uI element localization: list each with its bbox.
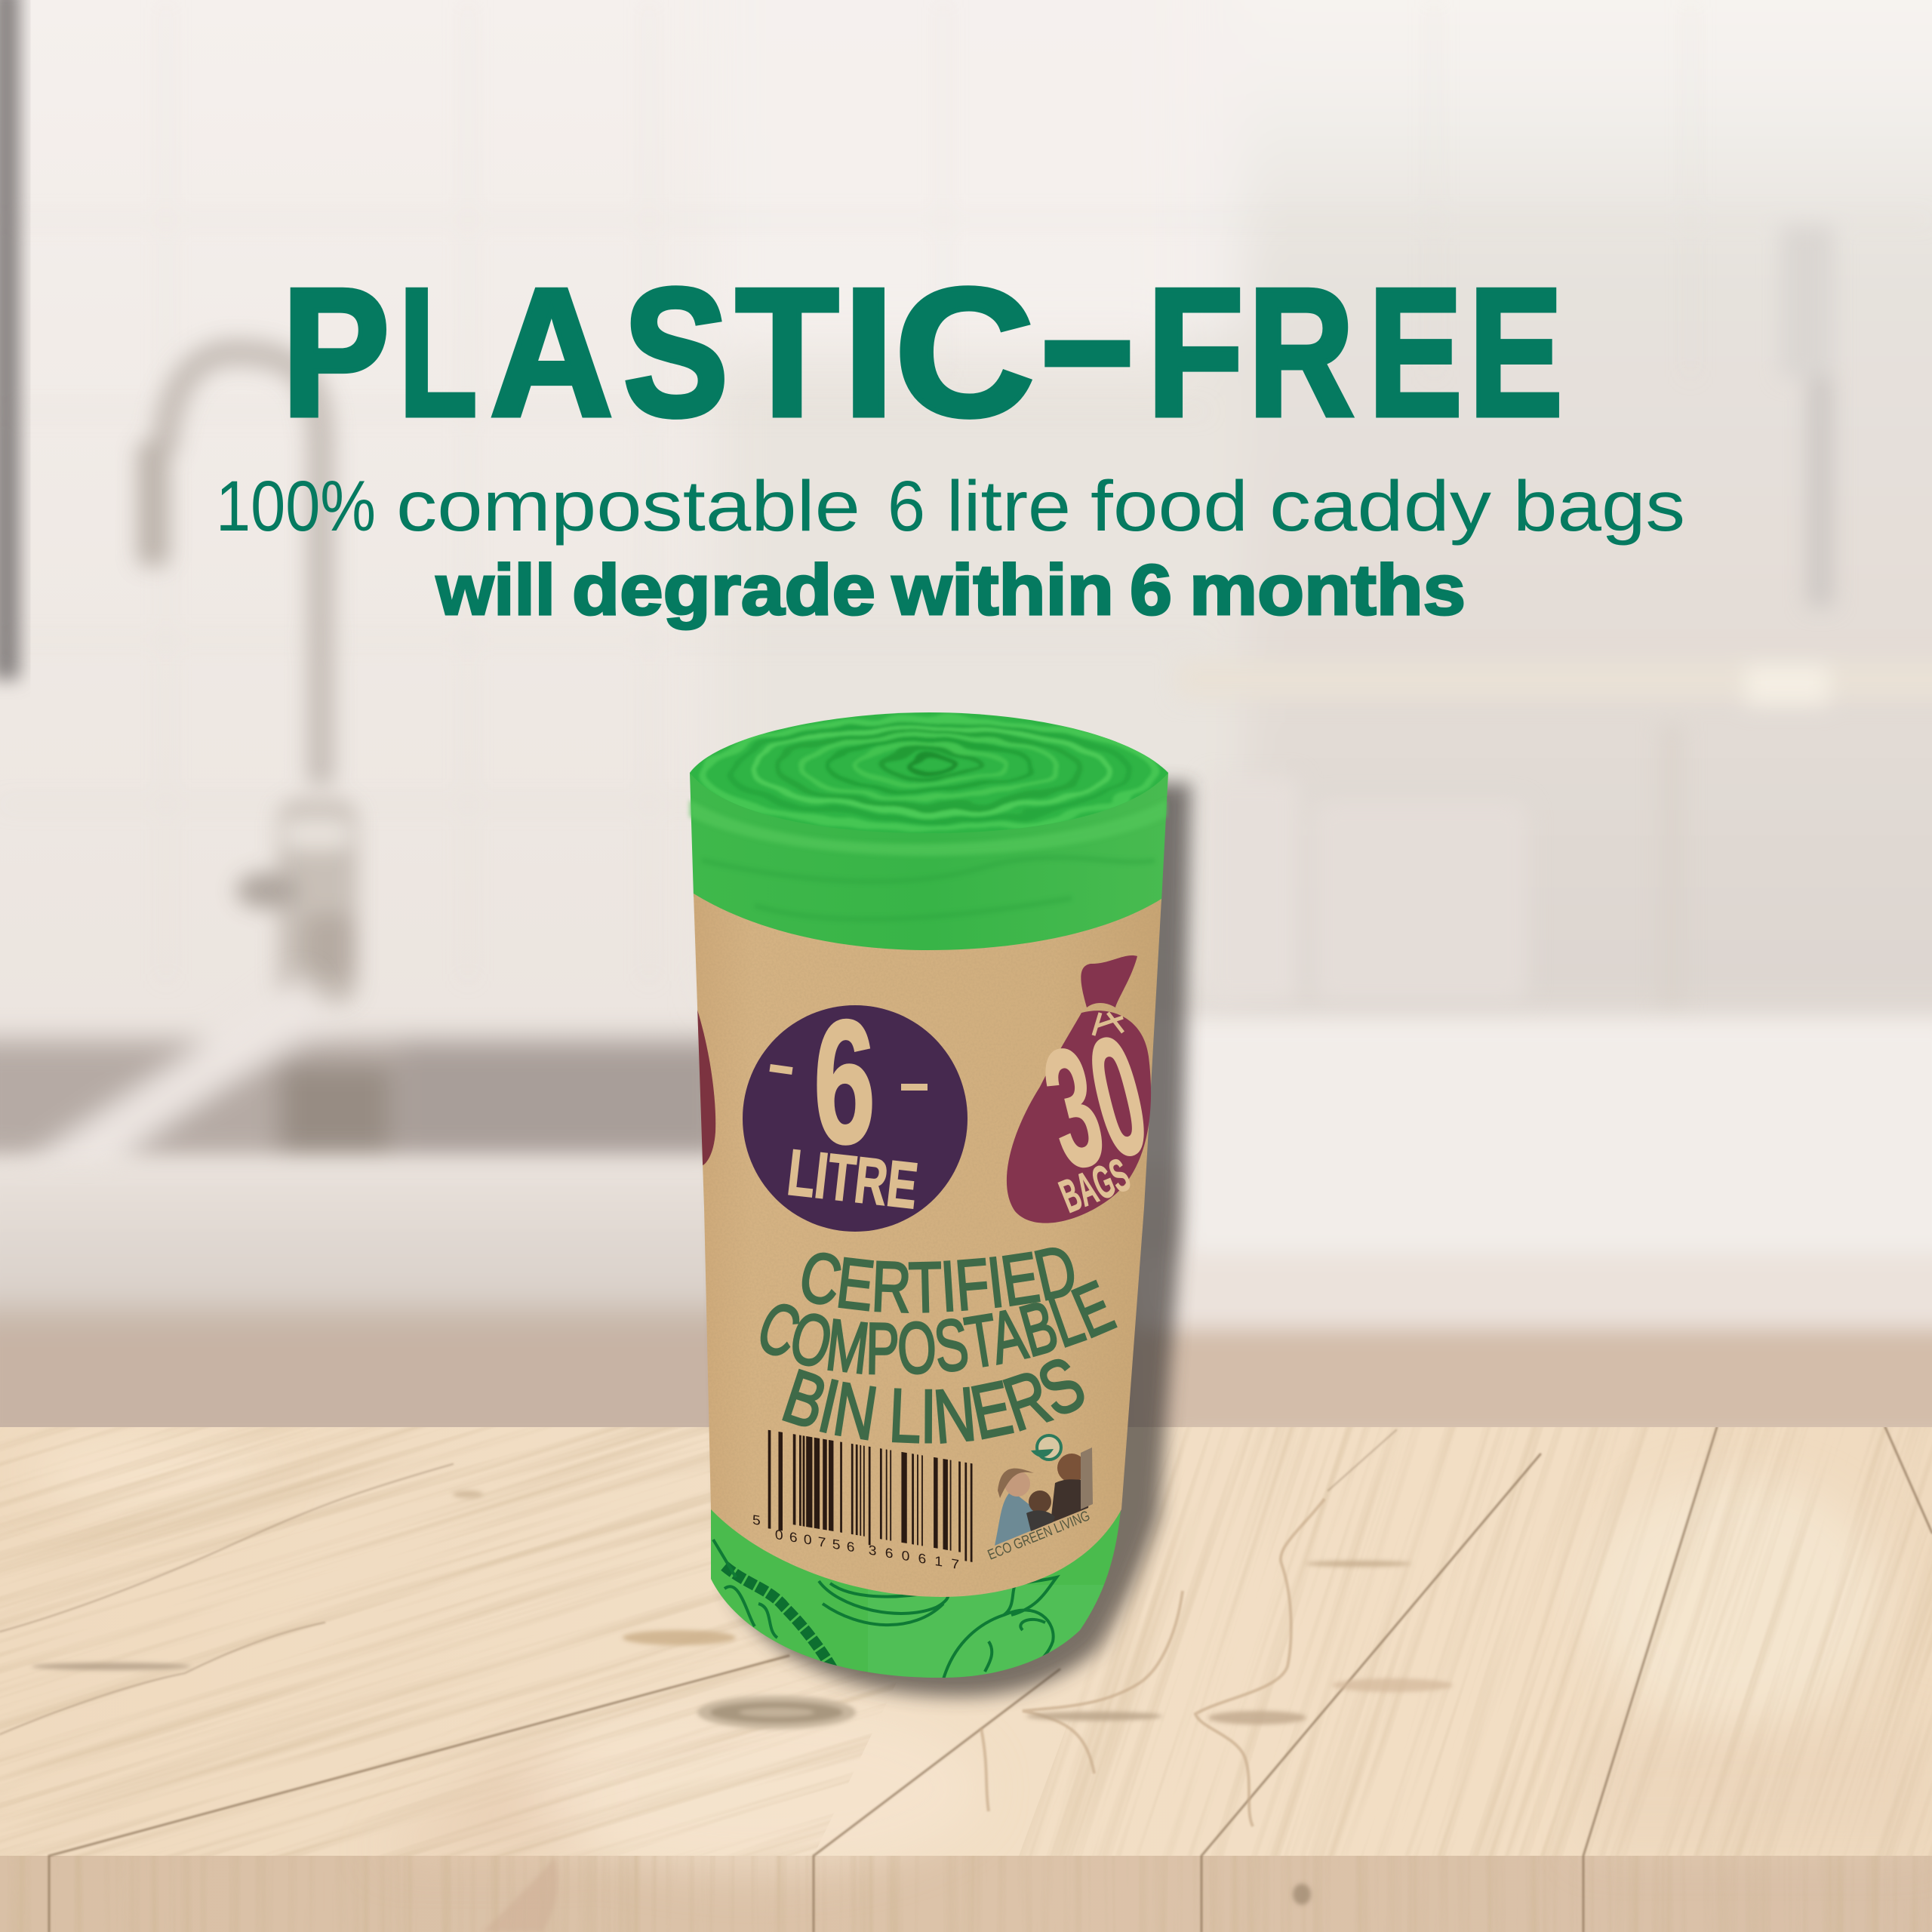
subtitle emphasis: months <box>1189 550 1466 630</box>
title: E <box>1369 251 1463 454</box>
roll shadow <box>709 783 1191 1697</box>
subtitle emphasis: 6 <box>1130 550 1172 630</box>
product name <box>761 1247 1118 1444</box>
background: counter <box>0 1019 1932 1449</box>
subtitle: caddy <box>1269 466 1492 546</box>
subtitle: 6 <box>888 466 925 546</box>
litre badge <box>743 984 968 1232</box>
table front edge <box>0 1856 1932 1932</box>
title: L <box>399 251 477 454</box>
roll green band <box>690 773 1168 952</box>
product name: CERTIFIED <box>801 1247 1075 1313</box>
title: - <box>1037 237 1138 440</box>
barcode: 060756 <box>775 1527 854 1555</box>
product name: BIN LINERS <box>782 1358 1084 1444</box>
30 bags badge: 30 <box>1028 998 1164 1205</box>
title: A <box>491 251 613 454</box>
product: bin liner roll <box>687 712 1169 1678</box>
wood knots <box>32 1491 1453 1905</box>
subtitle emphasis: will <box>435 550 555 630</box>
litre badge: LITRE <box>784 1136 921 1223</box>
title: I <box>844 251 894 454</box>
product name: COMPOSTABLE <box>761 1280 1118 1375</box>
background: left window strip <box>0 0 20 679</box>
subtitle emphasis: within <box>891 550 1114 630</box>
title: F <box>1147 251 1244 454</box>
title: C <box>895 251 1034 454</box>
wooden table <box>0 1427 1932 1932</box>
vegetable line art <box>713 1540 1057 1679</box>
barcode: 360617 <box>869 1542 959 1572</box>
wood grain texture <box>0 1427 1932 1932</box>
side bag sliver <box>696 1005 715 1166</box>
brand logo: three figures and globe <box>986 1435 1093 1564</box>
barcode: 5 <box>752 1512 761 1528</box>
litre badge: 6 <box>814 984 875 1180</box>
kraft paper sleeve <box>679 883 1177 1607</box>
title: E <box>1469 251 1562 454</box>
30 bags badge: BAGS <box>1053 1149 1137 1223</box>
background: sink <box>0 974 724 1174</box>
title: R <box>1248 251 1354 454</box>
barcode <box>752 1427 973 1574</box>
30 bags badge <box>1007 955 1164 1223</box>
subtitle emphasis: degrade <box>572 550 875 630</box>
brand logo: three figures and globe: ECO GREEN LIVING <box>986 1508 1092 1564</box>
subtitle: compostable <box>396 466 860 546</box>
subtitle: bags <box>1513 466 1685 546</box>
roll top spiral <box>679 702 1177 845</box>
roll bottom green <box>702 1494 1132 1690</box>
subtitle: litre <box>946 466 1071 546</box>
subtitle: 100% <box>216 466 376 546</box>
subtitle: food <box>1091 466 1248 546</box>
title: S <box>623 251 728 454</box>
plank seams <box>49 1427 1932 1932</box>
background: blurred kitchen <box>0 0 1932 1449</box>
title: P <box>282 251 389 454</box>
title: T <box>736 251 838 454</box>
curved wood grain <box>1195 1499 1324 1826</box>
background: faucet <box>137 352 358 1004</box>
